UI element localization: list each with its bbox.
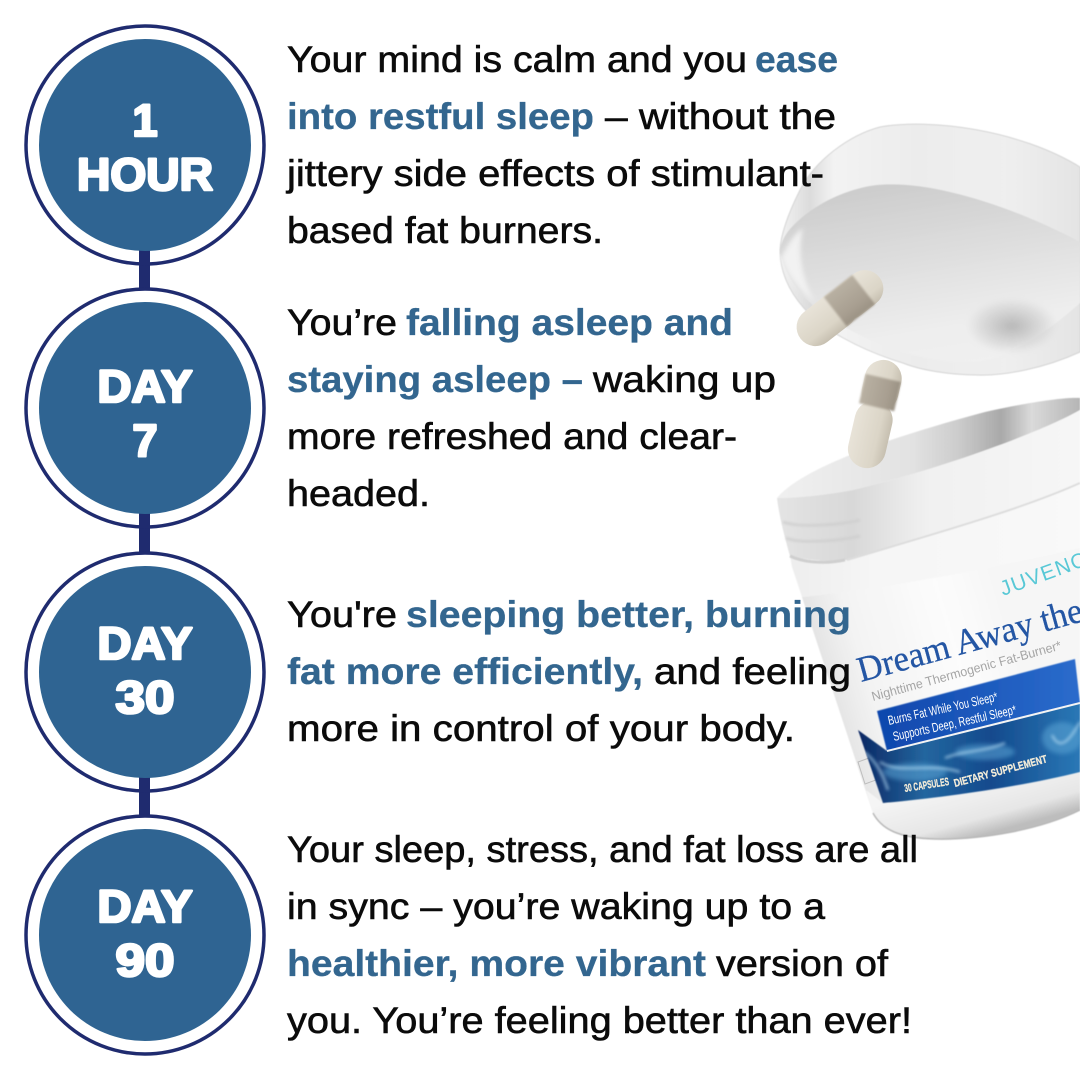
text block: day 30: sleeping better, burning	[406, 594, 851, 635]
milestone: day 30	[26, 553, 264, 792]
milestone: 1 hour: 1	[132, 95, 158, 146]
text block: day 7: You’re	[287, 302, 397, 343]
milestone: day 7: DAY	[98, 361, 192, 412]
milestone: day 90: 90	[116, 935, 174, 986]
text block: day 30: more in control of your body.	[287, 708, 795, 749]
milestone: 1 hour	[26, 26, 264, 265]
jar label text: Supports Deep, Restful Sleep*	[891, 702, 1018, 744]
text block: day 30: You're	[287, 594, 397, 635]
milestone: 1 hour: HOUR	[77, 149, 213, 200]
text block: 1 hour: into restful sleep	[287, 96, 594, 137]
text block: day 90: you. You’re feeling better than ever!	[287, 1000, 912, 1041]
text block: 1 hour: ease	[755, 39, 838, 80]
text block: day 90: in sync – you’re waking up to a	[287, 886, 825, 927]
timeline connector	[139, 245, 150, 832]
jar label text	[853, 526, 1080, 795]
text block: 1 hour: based fat burners.	[287, 210, 603, 251]
text block: 1 hour: jittery side effects of stimulant-	[286, 153, 824, 194]
text block: 1 hour: – without the	[605, 96, 836, 137]
jar label text: 30 CAPSULES	[904, 776, 950, 795]
jar lid	[780, 124, 1080, 375]
text block: day 7: headed.	[287, 473, 430, 514]
product: open supplement jar with lid and capsules	[777, 124, 1080, 839]
text block: day 30	[287, 594, 851, 749]
text block: day 7: staying asleep –	[287, 359, 583, 400]
text block: day 7	[287, 302, 776, 514]
text block: day 90: Your sleep, stress, and fat loss are all	[287, 829, 918, 870]
milestone: day 7	[26, 289, 264, 528]
text block: day 7: more refreshed and clear-	[287, 416, 737, 457]
milestone: day 30: DAY	[98, 618, 192, 669]
text block: 1 hour	[286, 39, 838, 251]
text block: day 7: falling asleep and	[406, 302, 733, 343]
label artwork band	[858, 659, 1080, 803]
text block: 1 hour: Your mind is calm and you	[287, 39, 747, 80]
text block: day 30: and feeling	[654, 651, 851, 692]
capsule: lower	[844, 356, 906, 472]
milestone: day 7: 7	[132, 415, 158, 466]
jar label text: Nighttime Thermogenic Fat-Burner*	[870, 638, 1063, 704]
jar label text: DIETARY SUPPLEMENT	[953, 753, 1049, 790]
capsule: upper	[789, 262, 891, 354]
milestone: day 90: DAY	[98, 881, 192, 932]
text block: day 30: fat more efficiently,	[287, 651, 643, 692]
text block: day 7: waking up	[592, 359, 776, 400]
text block: day 90	[287, 829, 918, 1041]
text block: day 90: healthier, more vibrant	[287, 943, 706, 984]
text block: day 90: version of	[716, 943, 889, 984]
milestone: day 30: 30	[116, 672, 174, 723]
jar body	[777, 398, 1080, 839]
jar label text: Burns Fat While You Sleep*	[886, 689, 999, 728]
milestone: day 90	[26, 816, 264, 1054]
